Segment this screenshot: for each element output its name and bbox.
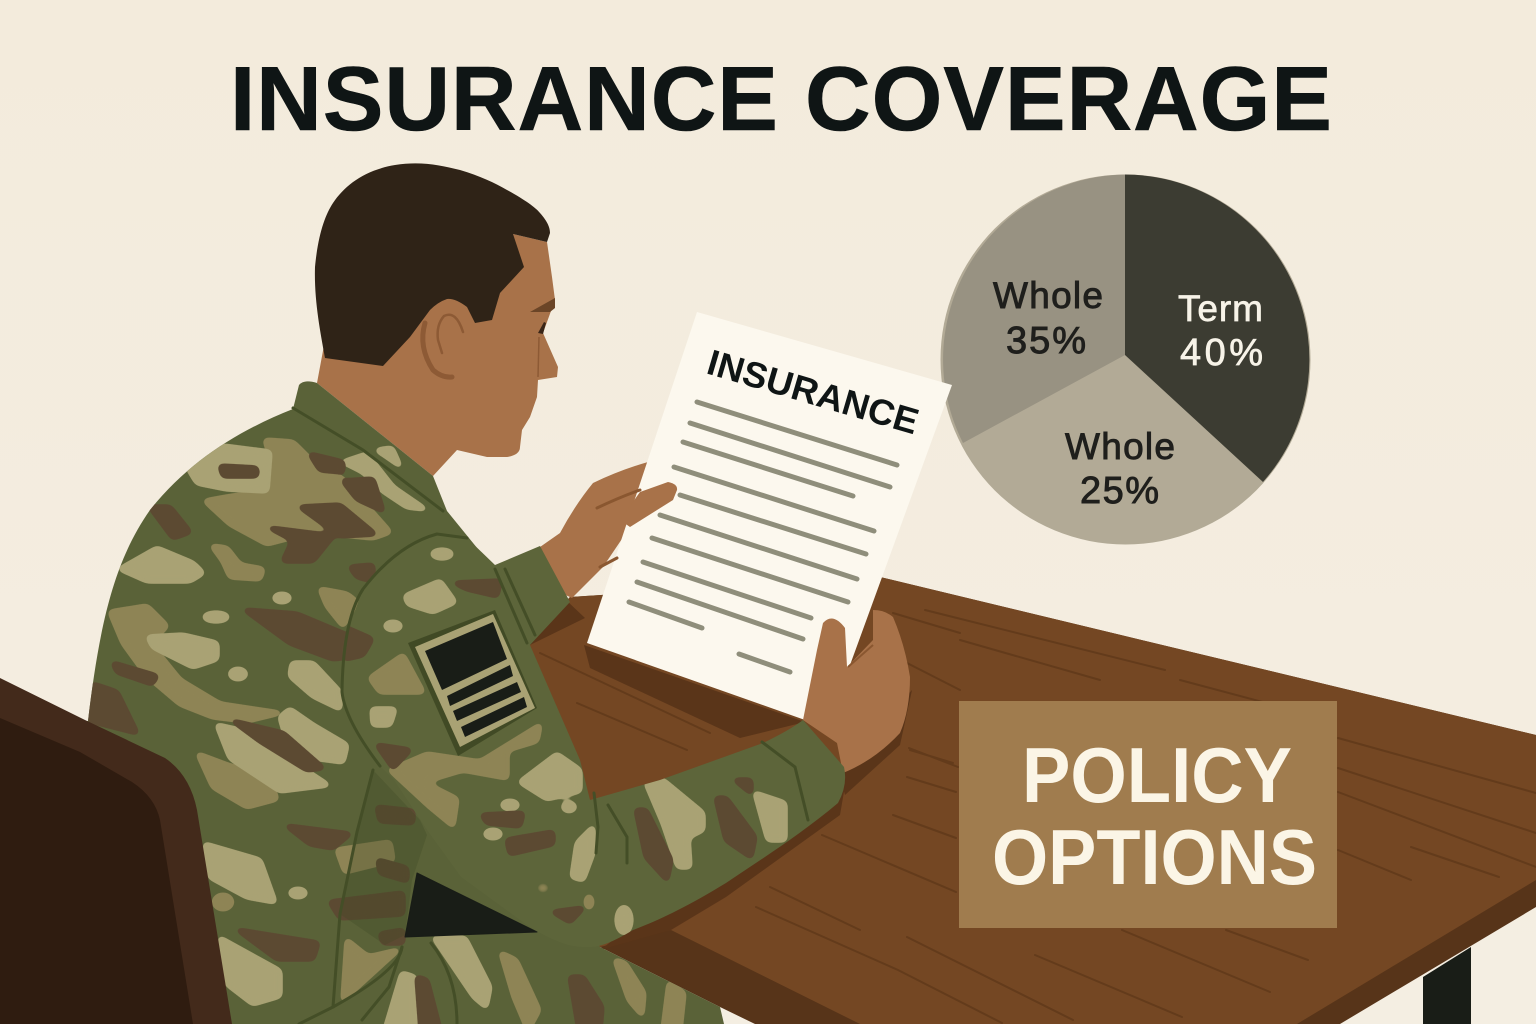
label: Term 40% [1178,288,1263,374]
shaded side under arm [340,770,427,945]
policy options sign [959,701,1337,928]
pie chart [940,174,1310,544]
insurance document [587,312,952,720]
document heading: INSURANCE [703,341,923,442]
far hand thumb over document [620,482,677,527]
shoulder patch [408,610,537,756]
table leg [1423,947,1471,1024]
document text lines [629,402,897,672]
label: Whole 35%: Whole [993,275,1103,316]
label: Whole 35%: 35% [1006,320,1086,362]
shadows on table [520,600,912,950]
near hand [803,610,910,773]
label: Whole 25%: Whole [1065,426,1175,467]
policy options sign: POLICY [1022,731,1292,819]
label: Whole 25% [1065,426,1175,512]
soldier [80,163,952,1024]
ear detail [423,315,463,377]
far hand creases [597,490,640,567]
neck and face [317,234,558,476]
eyebrow and eye [530,298,555,377]
torso seams [293,408,457,1024]
label: Term 40%: Term [1178,288,1263,329]
hair [315,163,550,366]
near arm sleeve [342,534,845,947]
camouflage on sleeve [340,548,785,935]
label: Whole 25%: 25% [1080,470,1159,512]
camouflage on torso [90,440,684,1024]
chair [0,678,232,1024]
uniform torso [80,381,724,1024]
label: Whole 35% [993,275,1103,362]
black case under arm [405,873,537,937]
table [410,577,1536,1024]
sleeve seams [342,534,808,863]
far hand [540,462,677,598]
label: Term 40%: 40% [1180,332,1263,374]
slice: Term 40% [1125,174,1309,482]
slice: Whole 35% [943,174,1125,443]
title: INSURANCE COVERAGE [230,49,1332,150]
policy options sign: OPTIONS [992,813,1317,901]
